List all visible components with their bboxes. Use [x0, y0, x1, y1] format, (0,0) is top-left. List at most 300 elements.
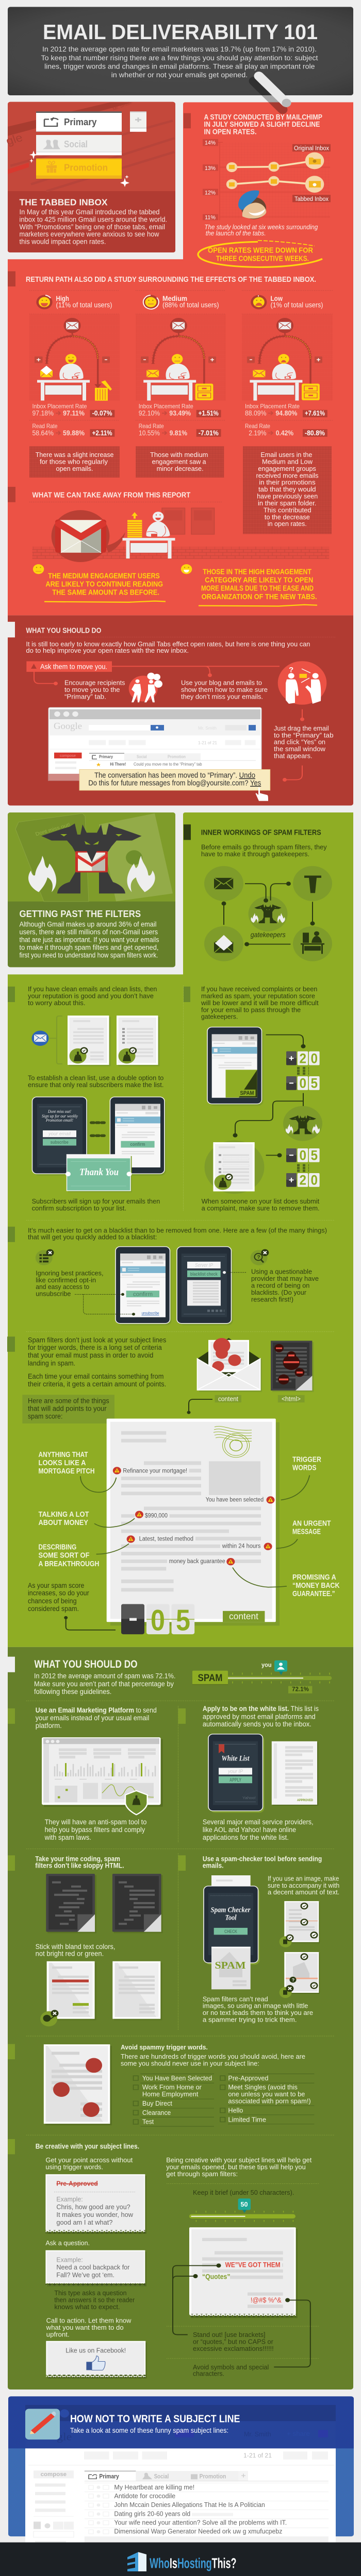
score counter: +20: 0	[310, 1051, 318, 1066]
inbox window: 1-21 of 21	[243, 2452, 272, 2459]
inbox row: Hi There!	[110, 762, 126, 767]
text box: low result: have previously seen	[257, 493, 318, 500]
callouts: right trigger labels: WORDS	[292, 1463, 317, 1472]
text: remove complainers	[202, 1198, 320, 1212]
phone: confirm and unsubscribe: confirm	[133, 1292, 153, 1297]
text: tabbed inbox body: With “Promotions” being one of those tabs, email	[20, 224, 165, 231]
icon: open envelope with content	[198, 1338, 262, 1392]
text: questionable provider: a record of being on	[251, 1282, 309, 1289]
icon: low face	[251, 295, 267, 309]
text: question explanation: knows what to expect.	[54, 2303, 120, 2311]
text: call to action: Call to action. Let them know	[46, 2317, 131, 2324]
card: facebook example: Like us on Facebook!	[65, 2347, 126, 2354]
section marker	[8, 987, 15, 1002]
text: filters body	[20, 921, 159, 959]
card: pre-approved example: good am I at what?	[56, 2219, 113, 2226]
heading: mailchimp study	[204, 113, 322, 136]
panel: what you should do (spam)	[8, 1647, 353, 2389]
icon: high face	[36, 295, 53, 309]
gauge: spam percentage	[192, 1660, 332, 1693]
stats: medium: +1.51%	[199, 410, 219, 417]
text: spam amount: following these guidelines.	[34, 1688, 111, 1696]
text: subscribers: confirm subscription to your list.	[32, 1205, 126, 1212]
block: blacklist	[8, 1227, 327, 1325]
stats: medium: 93.49%	[169, 410, 191, 417]
phone: confirm and unsubscribe: unsubscribe	[141, 1311, 159, 1316]
email document with trigger words	[107, 1418, 280, 1625]
text: avoid symbols: characters.	[193, 2370, 224, 2377]
text: medium engagement takeaway: THE SAME AMOUNT AS BEFORE.	[52, 588, 159, 597]
heading: mailchimp study: IN OPEN RATES.	[204, 127, 257, 136]
text box: high result: There was a slight increase	[36, 451, 114, 459]
series: original inbox	[226, 144, 331, 172]
text: filters cannot read images: a spammer trying to trick them.	[203, 2016, 297, 2023]
pin: 50	[238, 2198, 251, 2213]
series: tabbed inbox: Tabbed Inbox	[294, 195, 329, 202]
callouts: right trigger labels: AN URGENT	[292, 1519, 331, 1528]
tab: promotion: Promotion	[64, 163, 108, 173]
browser: gmail inbox: Mr. Smith	[198, 726, 217, 731]
text: white list providers	[203, 1819, 314, 1842]
receipt: approved application: APPROVED	[297, 1799, 313, 1802]
icon: filter funnel	[304, 875, 321, 893]
icon: medium face	[143, 295, 159, 309]
faded inbox background: Mr. Smith	[112, 100, 132, 111]
icon: image-only document	[280, 1952, 320, 1998]
illustration: gmail envelope	[52, 510, 125, 562]
text: spam checker: emails.	[203, 1862, 224, 1870]
text: avoid trigger words: There are hundreds of trigger words you should avoid, here are	[121, 2053, 305, 2060]
callouts: right trigger labels: TRIGGER	[292, 1455, 321, 1464]
text: stand out: or “quotes,” but no CAPS or	[193, 2338, 273, 2345]
heading: mailchimp study: IN JULY SHOWED A SLIGHT DECLINE	[204, 120, 320, 129]
text: just drag the email	[274, 725, 334, 759]
text: spam amount	[34, 1672, 175, 1696]
tip: coding	[8, 1855, 163, 2026]
text: tabbed inbox body	[20, 209, 167, 246]
score counter: -05 after cleanup: 0	[300, 1148, 306, 1163]
text: questionable provider	[251, 1268, 319, 1303]
icon: image-only document: ?	[292, 1977, 294, 1982]
inbox window	[25, 2405, 336, 2543]
text: ignoring best practices: like confirmed opt-in	[36, 1277, 96, 1284]
heading: how not to write a subject line: HOW NOT TO WRITE A SUBJECT LINE	[70, 2413, 240, 2425]
card: subject line dos and donts: “Quotes”	[202, 2273, 231, 2281]
stats: high: 97.18%	[32, 410, 54, 417]
stats: high: 97.11%	[63, 410, 85, 417]
text box: high result	[29, 446, 120, 478]
score counter: +20 after cleanup: 2	[300, 1173, 306, 1188]
text: white list providers: like AOL and Yahoo! have online	[203, 1826, 296, 1834]
text: just drag the email: to the “Primary” tab	[274, 732, 334, 739]
list: trigger words left	[133, 2074, 314, 2126]
list: trigger words right: associated with porn spam!)	[228, 2097, 311, 2105]
phone: white list application	[208, 1734, 264, 1812]
callout: add points: Here are some of the things	[28, 1397, 109, 1405]
text: tip heading	[36, 1706, 157, 1730]
card: subject line dos and donts: WE”VE GOT THEM	[225, 2261, 281, 2269]
text: criteria: landing in spam.	[28, 1360, 75, 1367]
score counter: -05 after cleanup: 5	[310, 1148, 318, 1163]
text: study note: The study looked at six weeks surrounding	[204, 224, 318, 231]
icon: document with sufficient text	[280, 1901, 320, 1947]
text: white list	[203, 1705, 319, 1728]
phone: spam checker tool: Spam Checker	[210, 1906, 251, 1914]
text box: low result: Email users in the	[260, 451, 313, 459]
text: question explanation: then answers it so the reader	[54, 2296, 135, 2303]
phone: white list application: your IP	[227, 1769, 243, 1774]
panel: getting past the filters	[8, 812, 175, 967]
phone: white list application: White List	[222, 1754, 250, 1762]
list: trigger words right: one unless you want to be	[228, 2091, 305, 2098]
callout: open rates down: OPEN RATES WERE DOWN FOR	[208, 246, 313, 255]
icon: person at desk	[301, 931, 324, 954]
text: clean lists: If you have clean emails and clean lists, then	[28, 986, 157, 993]
engagement columns	[29, 291, 333, 437]
pin: 50: 50	[240, 2201, 248, 2208]
browser: gmail inbox: compose	[60, 754, 76, 758]
text: study note	[204, 224, 318, 237]
text: intro: It is still too early to know exactly how Gmail Tabs effect open rates, but here is one thing you can	[26, 640, 310, 648]
text: medium label	[162, 295, 219, 309]
phone: signup form: subscribe	[51, 1140, 69, 1145]
callouts: right trigger labels	[292, 1455, 340, 1598]
connectors	[34, 666, 304, 781]
text: questionable provider: research first!)	[251, 1296, 293, 1303]
text: stand out: excessive exclamations!!!!!!	[193, 2345, 274, 2352]
text: medium label: Medium	[162, 295, 187, 303]
text box: low result	[243, 446, 332, 534]
icon: sparkles	[29, 150, 129, 187]
text: spam score increases: increases, so do your	[28, 1589, 89, 1597]
tab: social	[36, 135, 122, 155]
callout: conversation moved: Do this for future messages from blog@yoursite.com? Yes	[88, 778, 261, 787]
gauge: spam percentage: 72.1%	[292, 1686, 309, 1693]
inbox row: Could you move me to the “Primary” tab	[134, 762, 202, 767]
icon: happy face	[181, 564, 192, 574]
phone: marked as spam	[207, 1027, 263, 1106]
text: use your blog: Use your blog and emails to	[181, 679, 262, 686]
connectors	[222, 882, 315, 946]
icon: sloppy html document	[46, 1874, 96, 1933]
text: call to action: upfront.	[46, 2331, 70, 2338]
text: spam score increases: As your spam score	[28, 1582, 84, 1590]
faded inbox background	[4, 100, 174, 191]
icon: postmark stamp	[214, 1426, 252, 1458]
text: creative tips intro: Being creative with your subject lines will help get	[166, 2157, 311, 2164]
tip: white list	[178, 1705, 319, 1842]
tip: be creative	[8, 2139, 319, 2378]
text: clean lists	[28, 986, 157, 1007]
text: no trigger words: using trigger words.	[45, 2163, 103, 2171]
score counter: -05	[286, 1076, 320, 1091]
icon: building logo	[127, 2552, 146, 2571]
illustration: brick wall and windows	[32, 508, 329, 559]
intro text: In 2012 the average open rate for email marketers was 19.7% (up from 17% in 2010).	[42, 46, 317, 54]
text: complaints: marked as spam, your reputation score	[201, 992, 315, 999]
text: low label: Low	[270, 295, 283, 303]
text: anti-spam tool: help you bypass filters and comply	[45, 1826, 145, 1834]
text: creative tips intro: your emails opened, but these tips will help you	[166, 2163, 306, 2171]
callouts: left trigger labels: LOOKS LIKE A	[39, 1459, 86, 1467]
connectors	[233, 1035, 305, 1157]
section marker	[184, 987, 190, 1002]
text: avoid trigger words: Avoid spammy trigger words.	[121, 2044, 208, 2051]
text: tabbed inbox body: marketers everywhere were anxious to see how	[20, 231, 159, 239]
text: spam score increases	[28, 1582, 89, 1613]
text: ignoring best practices: and easy access to	[36, 1283, 90, 1291]
text: spam checker: Use a spam-checker tool before sending	[203, 1855, 322, 1863]
card: facebook example	[46, 2341, 147, 2378]
stats: high: 58.64%	[32, 430, 54, 437]
icon: you pin	[274, 1660, 287, 1675]
heading: what we can take away: WHAT WE CAN TAKE AWAY FROM THIS REPORT	[32, 490, 190, 499]
icon: two people talking	[129, 673, 162, 702]
intro text: lines, trigger words and changes in email platforms. These all play an important role	[44, 63, 315, 71]
text: encourage recipients: to move you to the	[64, 686, 120, 693]
text: high engagement takeaway	[199, 567, 317, 606]
callouts: left trigger labels: SOME SORT OF	[39, 1551, 90, 1560]
illustration: low	[242, 314, 333, 401]
inbox window: Mr. Smith	[244, 2431, 271, 2438]
score counter: +20: 2	[300, 1051, 306, 1066]
text: bland colors: Stick with bland text colors,	[36, 1943, 115, 1951]
stats: medium: Read Rate	[139, 422, 164, 430]
text: complaints	[201, 986, 319, 1021]
browser: gmail inbox: Google	[54, 721, 82, 732]
card: pre-approved example: Pre-Approved	[56, 2180, 98, 2187]
section marker	[8, 2044, 15, 2059]
stats: high: Read Rate	[32, 422, 58, 430]
callouts: left trigger labels: DESCRIBING	[39, 1543, 76, 1551]
line chart: open rates	[203, 139, 331, 221]
text: double opt-in: To establish a clean list, use a double option to	[28, 1074, 164, 1081]
list: trigger words left: Work From Home or	[142, 2083, 202, 2091]
callout: conversation moved: The conversation has been moved to “Primary”. Undo	[94, 771, 255, 779]
callout: ask them to move you: Ask them to move you.	[40, 663, 107, 671]
section marker	[178, 1708, 186, 1724]
list: trigger words left: You Have Been Selected	[142, 2075, 212, 2082]
score counter: -05 after cleanup	[286, 1148, 320, 1163]
text: intro	[26, 640, 310, 654]
text: call to action	[46, 2317, 131, 2338]
text: high engagement takeaway: ORGANIZATION OF THE NEW TABS.	[202, 592, 317, 601]
text: filters cannot read images: or no text leads them to think you are	[203, 2009, 314, 2016]
heading: WHAT YOU SHOULD DO	[26, 626, 101, 635]
icon: mailchimp monkey	[238, 191, 266, 219]
stats: medium: 10.55%	[139, 430, 160, 437]
text: white list: approved by most email platforms and	[203, 1713, 316, 1721]
text: question explanation: This type asks a question	[54, 2290, 127, 2297]
icon: gift	[46, 165, 57, 173]
section marker	[8, 1708, 15, 1724]
text: image advice: If you use an image, make	[268, 1875, 339, 1882]
callout: add points: that will add points to your	[28, 1405, 107, 1413]
text: coding tip	[35, 1855, 124, 1870]
inbox window: + share	[287, 2430, 310, 2437]
section marker	[8, 622, 15, 637]
heading: getting past the filters: GETTING PAST THE FILTERS	[20, 909, 141, 920]
section marker	[8, 1855, 15, 1871]
text: just drag the email: and click “Yes” on	[274, 738, 325, 745]
tab: promotion	[36, 159, 122, 179]
text: filters cannot read images: images, so using an image with little	[203, 2002, 308, 2010]
callouts: left trigger labels	[39, 1450, 99, 1568]
list: trigger words left: Clearance	[142, 2109, 171, 2116]
text: complaints: gatekeepers.	[201, 1013, 238, 1021]
icon: neutral face	[33, 564, 44, 574]
card: pre-approved example: Example:	[56, 2196, 83, 2203]
icon: pencil	[25, 2409, 60, 2439]
phone: server ip blacklist check	[177, 1247, 233, 1325]
card: pre-approved example: Chris, how good are you?	[56, 2204, 130, 2211]
score counter: +20 after cleanup	[286, 1173, 320, 1188]
block: spam score criteria	[7, 1336, 340, 1637]
phone: signup form: Dont miss out!	[47, 1109, 71, 1114]
panel: header chalkboard	[8, 7, 353, 95]
icon: chalk stick	[254, 76, 291, 110]
text: questionable provider: blacklists. (Do your	[251, 1289, 306, 1296]
inbox window: compose	[41, 2472, 67, 2478]
funny spam subject lines: Your wife need your attention? Solve all the problems with IT.	[114, 2519, 287, 2526]
stats: low: 94.80%	[275, 410, 298, 417]
text box: medium result: engagement saw a	[152, 458, 206, 465]
faded signup form background: Dont miss out!	[35, 822, 71, 837]
phone: confirmation email: confirm	[130, 1142, 145, 1147]
text: call to action: what you want them to do	[46, 2324, 124, 2331]
text: avoid trigger words	[121, 2044, 305, 2067]
inbox row	[96, 762, 202, 767]
section marker	[7, 1336, 15, 1352]
column: low	[242, 295, 333, 437]
card: question example: Fall? We’ve got ‘em.	[56, 2272, 114, 2279]
inbox row lines	[85, 2483, 329, 2537]
trigger: you have been selected: You have been selected	[206, 1496, 264, 1503]
panel: what you should do (gmail)	[8, 615, 353, 806]
text: tip heading: platform.	[36, 1722, 62, 1730]
list: trigger words right: Meet Singles (avoid this	[228, 2083, 298, 2091]
label: html: <html>	[282, 1395, 301, 1402]
heading: be creative: Be creative with your subject lines.	[36, 2143, 139, 2150]
callout: add points	[22, 1395, 114, 1423]
callouts: left trigger labels: ABOUT MONEY	[39, 1518, 88, 1527]
trigger: refinance your mortgage	[113, 1467, 187, 1475]
gauge: 50 characters	[189, 2198, 296, 2222]
funny spam subject lines: Antidote for crocodile	[114, 2493, 176, 2500]
browser: analytics dashboard	[42, 1737, 163, 1815]
illustration: clean lists	[32, 1015, 160, 1066]
document one	[68, 1015, 110, 1066]
icon: opened envelope	[214, 935, 233, 953]
text box: medium result: Those with medium	[150, 451, 208, 459]
connector: dotted lines	[75, 1271, 247, 1315]
text: subscribers	[32, 1198, 160, 1212]
text box: low result: in their spam folder.	[258, 500, 316, 507]
text: question explanation	[54, 2290, 135, 2311]
series: original inbox: Original Inbox	[294, 145, 330, 151]
illustration: medium	[136, 314, 226, 401]
icon: colored text document	[40, 1961, 96, 2026]
section marker	[184, 113, 191, 128]
phone: spam checker tool: CHECK	[224, 1929, 238, 1935]
stats: low: Read Rate	[245, 422, 270, 430]
icon: two people exchanging email: ?	[289, 666, 293, 674]
text: double opt-in	[28, 1074, 164, 1089]
phone: confirm and unsubscribe	[116, 1247, 171, 1325]
phone: signup form: Sign up for our weekly	[42, 1113, 78, 1118]
tab: primary: Primary	[64, 117, 97, 128]
faded inbox background: gle	[4, 131, 24, 147]
score counter: -05 large: 5	[176, 1604, 190, 1637]
stats: medium: -7.01%	[199, 430, 219, 437]
text box: low result: tab that they would	[258, 486, 316, 493]
phone: confirmation email	[110, 1097, 166, 1176]
inbox tabs: Primary	[99, 2473, 119, 2480]
card: thank you: Thank You	[79, 1167, 119, 1178]
funny spam subject lines	[114, 2484, 287, 2535]
text: ignoring best practices	[36, 1269, 103, 1297]
text box: high result: open emails.	[56, 465, 93, 472]
phone: server ip blacklist check: blacklist check	[190, 1272, 218, 1277]
stats: high: 59.88%	[63, 430, 85, 437]
text box: high result: for those who regularly	[40, 458, 108, 465]
text: medium engagement takeaway: ARE LIKELY TO CONTINUE READING	[45, 580, 163, 588]
icon: two people exchanging email	[278, 661, 326, 705]
text: creative tips intro: get through spam filters:	[166, 2171, 238, 2178]
text: just drag the email: the small window	[274, 745, 325, 753]
score counter: -05: 5	[310, 1076, 318, 1091]
text: tip heading: your emails instead of your usual email	[36, 1715, 149, 1722]
callouts: right trigger labels: GUARANTEE.”	[292, 1589, 335, 1598]
stats: medium	[139, 402, 221, 437]
text: inner workings: have to make it through gatekeepers.	[201, 851, 309, 858]
text box: medium result	[136, 446, 224, 478]
phone: signup form: your email	[48, 1131, 71, 1137]
text box: low result: This contributed	[264, 506, 311, 514]
text: use your blog: they don’t miss your emails.	[181, 693, 263, 700]
inbox tabs	[89, 753, 201, 760]
text: high label: (11% of total users)	[56, 301, 112, 309]
axis labels: 14%	[205, 139, 216, 146]
text: creative tips intro	[166, 2157, 311, 2178]
text: criteria: that your email must pass in order to avoid	[28, 1352, 153, 1360]
tip: email marketing platform	[8, 1706, 163, 1842]
trigger: refinance your mortgage: Refinance your mortgage!	[123, 1467, 187, 1474]
text: criteria	[28, 1336, 166, 1388]
text: encourage recipients: “Primary” tab.	[64, 693, 106, 700]
text: spam amount: Make sure you aren’t part of that percentage by	[34, 1681, 174, 1688]
list: trigger words left: Test	[142, 2118, 154, 2126]
inbox tabs: Promotion	[168, 754, 186, 759]
stats: medium: Inbox Placement Rate	[139, 402, 193, 410]
icon: cleaned list document	[204, 1140, 264, 1194]
tab: primary	[36, 111, 122, 132]
stats: low	[245, 402, 327, 437]
text: tabbed inbox body: this would impact open rates.	[20, 238, 106, 246]
text: encourage recipients: Encourage recipients	[64, 679, 125, 686]
label: gatekeepers: gatekeepers	[251, 931, 286, 939]
icon: broom shield	[125, 1791, 147, 1815]
text box: low result: to the decrease	[265, 513, 310, 521]
text: medium engagement takeaway	[44, 571, 166, 602]
stats: low: Inbox Placement Rate	[245, 402, 300, 410]
section marker	[184, 824, 191, 840]
text: no trigger words: Get your point across without	[45, 2157, 133, 2164]
text: anti-spam tool: with spam laws.	[44, 1834, 91, 1842]
text: complaints: for your email to pass through the	[201, 1006, 301, 1013]
list: trigger words left: Home Employment	[142, 2091, 199, 2098]
text: inner workings: Before emails go through spam filters, they	[201, 843, 327, 851]
